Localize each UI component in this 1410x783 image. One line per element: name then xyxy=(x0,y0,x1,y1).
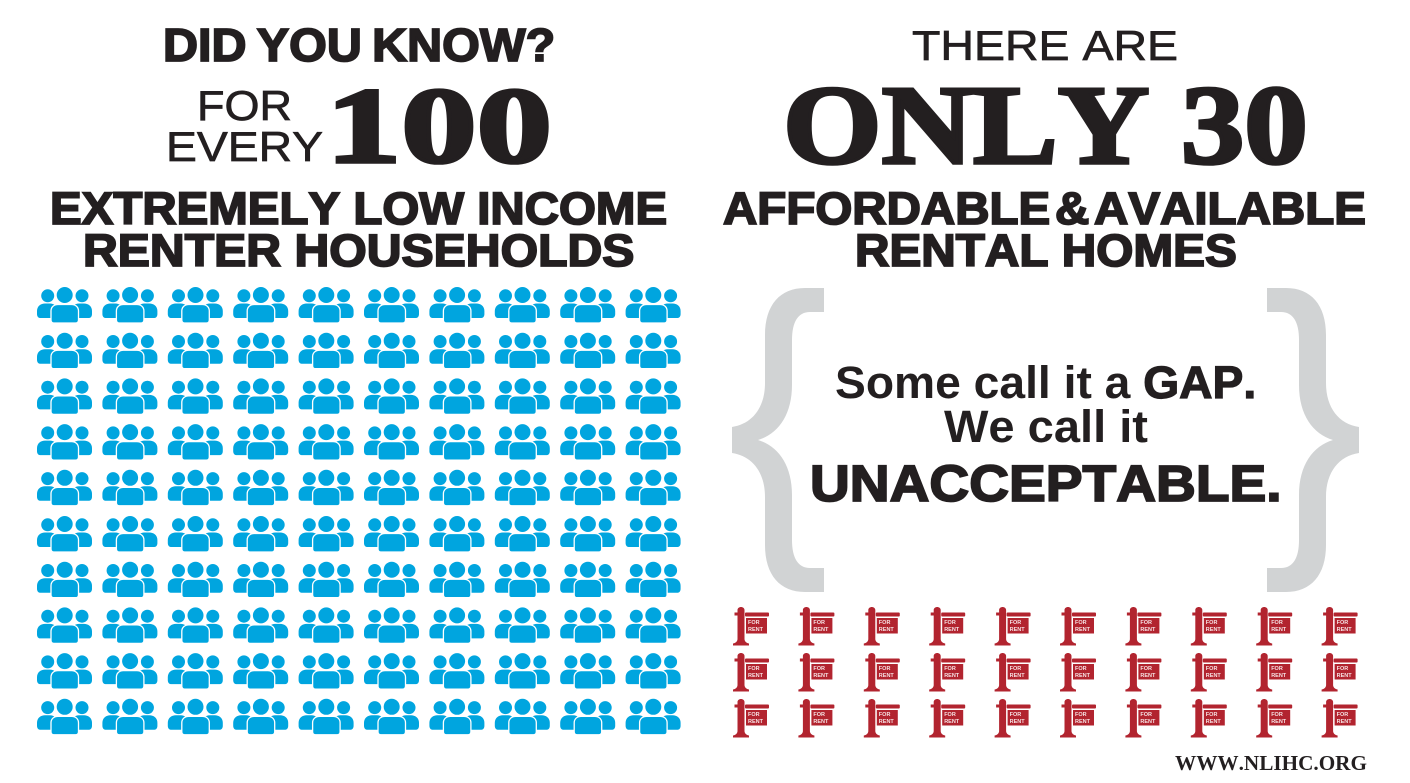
icon grid: 30 for rent signs: RENT xyxy=(944,719,960,725)
heading: affordable and available rental homes: RENTAL HOMES xyxy=(855,225,1237,276)
icon grid: 30 for rent signs: FOR xyxy=(1337,712,1348,718)
icon grid: 30 for rent signs: FOR xyxy=(1075,712,1087,718)
icon grid: 30 for rent signs: FOR xyxy=(1140,666,1152,672)
icon grid: 30 for rent signs: FOR xyxy=(1075,666,1087,672)
big text only 30: ONLY 30 xyxy=(783,63,1308,187)
icon grid: 30 for rent signs: FOR xyxy=(1206,620,1217,626)
icon grid: 30 for rent signs: FOR xyxy=(1075,620,1087,626)
icon grid: 30 for rent signs: RENT xyxy=(1075,719,1091,725)
icon grid: 30 for rent signs: RENT xyxy=(1206,673,1221,679)
heading: affordable and available rental homes: AFFORDABLE & AVAILABLE xyxy=(723,183,1366,234)
icon grid: 30 for rent signs: FOR xyxy=(944,712,956,718)
icon grid: 30 for rent signs: RENT xyxy=(1337,673,1352,679)
icon grid: 30 for rent signs: RENT xyxy=(879,673,894,679)
source url: WWW.NLIHC.ORG xyxy=(1175,751,1367,775)
icon grid: 30 for rent signs: FOR xyxy=(1140,712,1152,718)
icon grid: 30 for rent signs: FOR xyxy=(879,666,890,672)
heading: extremely low income renter households: EXTREMELY LOW INCOME xyxy=(50,183,667,234)
icon grid: 30 for rent signs: RENT xyxy=(879,719,894,725)
icon grid: 30 for rent signs: FOR xyxy=(1271,666,1283,672)
callout: some call it a gap, we call it unacceptable: Some call it a GAP. xyxy=(835,358,1256,408)
icon grid: 30 for rent signs: FOR xyxy=(813,666,825,672)
icon grid: 30 for rent signs: RENT xyxy=(1337,719,1352,725)
callout: some call it a gap, we call it unacceptable: UNACCEPTABLE. xyxy=(810,456,1282,513)
icon grid: 30 for rent signs xyxy=(733,607,1358,738)
icon grid: 30 for rent signs: FOR xyxy=(1337,666,1348,672)
heading: affordable and available rental homes xyxy=(723,183,1366,276)
icon grid: 30 for rent signs: RENT xyxy=(1010,673,1025,679)
icon grid: 30 for rent signs: FOR xyxy=(1010,620,1021,626)
big number 100: 100 xyxy=(326,66,552,186)
heading: did you know: DID YOU KNOW? xyxy=(163,20,555,72)
icon grid: 30 for rent signs: FOR xyxy=(879,712,890,718)
icon grid: 30 for rent signs: RENT xyxy=(748,719,764,725)
icon grid: 30 for rent signs: FOR xyxy=(748,712,760,718)
icon grid: 100 renter households xyxy=(37,287,681,735)
icon grid: 30 for rent signs: RENT xyxy=(813,673,829,679)
icon grid: 30 for rent signs: FOR xyxy=(813,712,825,718)
icon grid: 30 for rent signs: FOR xyxy=(1271,712,1283,718)
icon grid: 30 for rent signs: FOR xyxy=(1140,620,1152,626)
heading: extremely low income renter households: RENTER HOUSEHOLDS xyxy=(83,225,634,276)
heading: there are: THERE ARE xyxy=(912,23,1178,69)
icon grid: 30 for rent signs: RENT xyxy=(1271,627,1287,633)
icon grid: 30 for rent signs: FOR xyxy=(1271,620,1283,626)
icon grid: 30 for rent signs: RENT xyxy=(1206,627,1221,633)
icon grid: 30 for rent signs: FOR xyxy=(1010,712,1021,718)
icon grid: 30 for rent signs: FOR xyxy=(1206,666,1217,672)
heading: for every: EVERY xyxy=(166,124,323,170)
icon grid: 30 for rent signs: RENT xyxy=(813,627,829,633)
icon grid: 30 for rent signs: RENT xyxy=(813,719,829,725)
icon grid: 30 for rent signs: RENT xyxy=(944,627,960,633)
callout: some call it a gap, we call it unacceptable xyxy=(810,358,1282,513)
icon grid: 30 for rent signs: FOR xyxy=(1010,666,1021,672)
heading: extremely low income renter households xyxy=(50,183,667,276)
heading: for every: FOR xyxy=(197,83,292,130)
icon grid: 30 for rent signs: RENT xyxy=(1075,673,1091,679)
right curly brace xyxy=(1267,288,1359,592)
icon grid: 30 for rent signs: RENT xyxy=(1075,627,1091,633)
heading: for every xyxy=(166,83,323,170)
icon grid: 30 for rent signs: RENT xyxy=(879,627,894,633)
icon grid: 30 for rent signs: RENT xyxy=(1140,719,1156,725)
icon grid: 30 for rent signs: FOR xyxy=(1206,712,1217,718)
icon grid: 30 for rent signs: RENT xyxy=(1271,673,1287,679)
icon grid: 30 for rent signs: RENT xyxy=(1337,627,1352,633)
icon grid: 30 for rent signs: RENT xyxy=(748,673,764,679)
icon grid: 30 for rent signs: RENT xyxy=(1140,673,1156,679)
icon grid: 30 for rent signs: RENT xyxy=(1010,627,1025,633)
icon grid: 30 for rent signs: RENT xyxy=(1206,719,1221,725)
icon grid: 30 for rent signs: FOR xyxy=(748,666,760,672)
icon grid: 30 for rent signs: RENT xyxy=(1271,719,1287,725)
icon grid: 30 for rent signs: FOR xyxy=(944,620,956,626)
icon grid: 30 for rent signs: RENT xyxy=(1140,627,1156,633)
icon grid: 30 for rent signs: FOR xyxy=(879,620,890,626)
icon grid: 30 for rent signs: RENT xyxy=(748,627,764,633)
callout: some call it a gap, we call it unacceptable: We call it xyxy=(944,401,1148,452)
icon grid: 30 for rent signs: RENT xyxy=(1010,719,1025,725)
icon grid: 30 for rent signs: FOR xyxy=(748,620,760,626)
icon grid: 30 for rent signs: FOR xyxy=(944,666,956,672)
icon grid: 30 for rent signs: FOR xyxy=(1337,620,1348,626)
icon grid: 30 for rent signs: RENT xyxy=(944,673,960,679)
left curly brace xyxy=(732,288,824,592)
icon grid: 30 for rent signs: FOR xyxy=(813,620,825,626)
